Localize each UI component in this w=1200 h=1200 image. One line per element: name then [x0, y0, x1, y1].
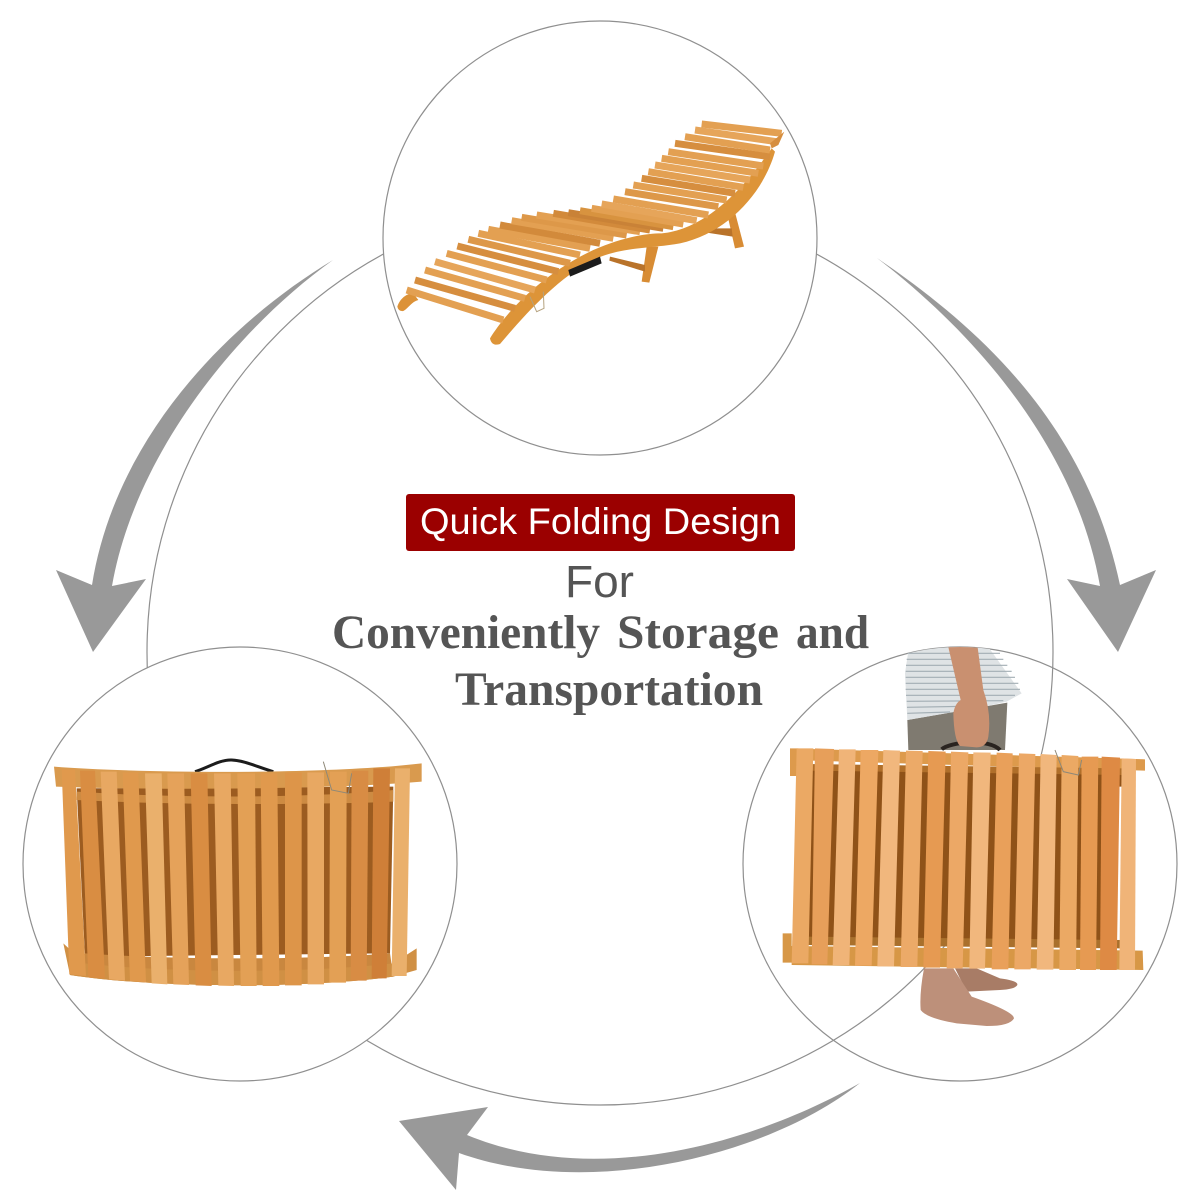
arrow: top to right [877, 258, 1156, 652]
photo: unfolded wooden lounger [397, 124, 784, 345]
arrow: top to left [56, 260, 333, 652]
striped shirt [905, 640, 1022, 720]
large cycle ring [147, 199, 1053, 1105]
folded slats [807, 767, 1122, 942]
photo: folded lounger on its own [54, 760, 422, 986]
heading badge [406, 494, 795, 551]
text: main message: and [796, 606, 869, 659]
text: main message [332, 606, 869, 716]
heading badge: Quick Folding Design [420, 501, 781, 542]
carry handle [942, 742, 1000, 750]
circle: top [383, 21, 817, 455]
arrow: right to left bottom [399, 1083, 860, 1190]
back foot [955, 968, 1017, 992]
arm and hand [947, 640, 989, 747]
text: main message: Storage [617, 606, 779, 659]
text: main message: Conveniently [332, 606, 600, 659]
text: For: For [565, 556, 634, 607]
trousers [907, 703, 1007, 750]
circle: right [743, 647, 1177, 1081]
photo: person carrying folded lounger [783, 640, 1145, 1026]
circle: left [23, 647, 457, 1081]
text: main message: Transportation [455, 663, 763, 716]
front foot [920, 968, 1014, 1026]
